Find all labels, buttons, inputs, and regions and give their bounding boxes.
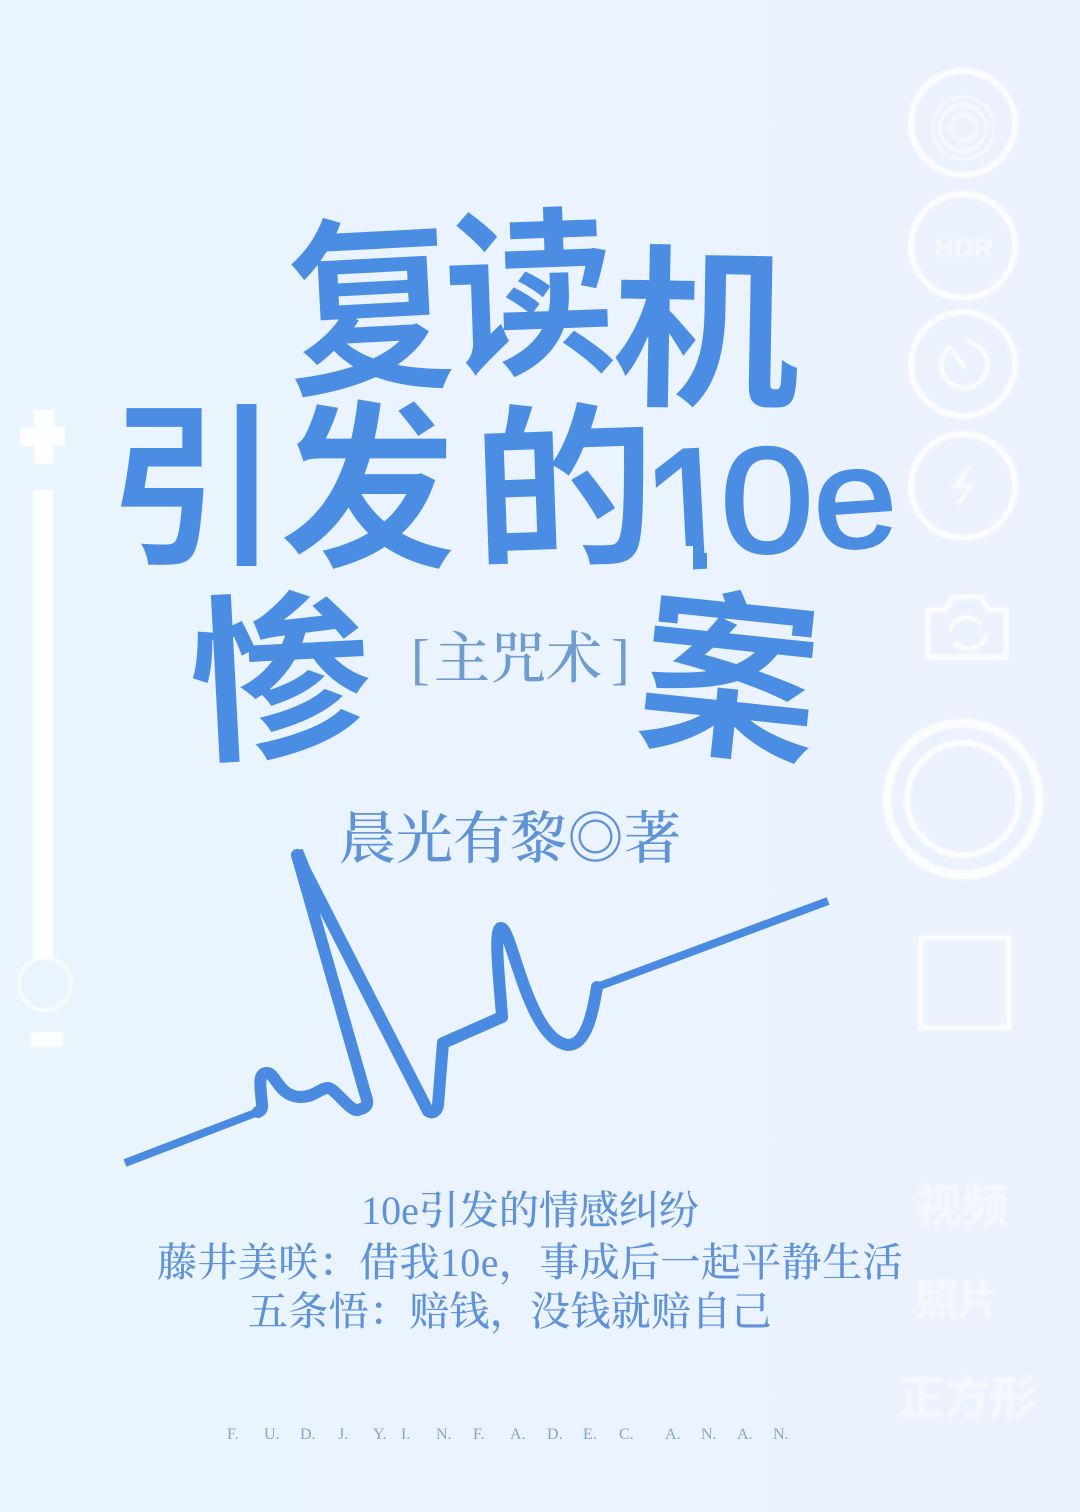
pinyin footer: F. (227, 1426, 239, 1443)
slider knob (19, 958, 71, 1010)
title line 1: 读 (441, 195, 619, 402)
icon: video mode ring (911, 71, 1015, 175)
icon: gallery square (921, 938, 1009, 1028)
icon: switch camera (928, 597, 1006, 657)
title line 2: 的 (469, 390, 659, 593)
pinyin footer: J. (338, 1426, 348, 1443)
pinyin footer: A. (665, 1426, 681, 1443)
label: square: 正方形 (898, 1372, 1036, 1424)
pinyin footer: A. (737, 1426, 753, 1443)
pinyin footer: U. (264, 1426, 280, 1443)
pinyin footer: D. (300, 1426, 316, 1443)
icon: HDR ring (911, 194, 1015, 298)
pinyin footer: N. (701, 1426, 717, 1443)
icon: shutter button (887, 723, 1039, 875)
title line 2: e (807, 417, 902, 581)
icon: HDR ring: HDR (935, 233, 993, 263)
series tag: [ (411, 629, 430, 691)
pinyin footer: F. (473, 1426, 485, 1443)
synopsis (157, 1188, 903, 1334)
title line 1: 机 (610, 233, 802, 432)
title line 2 (120, 399, 892, 570)
title line 3 left: 惨 (184, 576, 378, 787)
main title (108, 195, 902, 791)
synopsis: 五条悟：赔钱，没钱就赔自己 (248, 1289, 772, 1334)
series tag: 主咒术 (434, 629, 602, 691)
icon: flash ring (911, 434, 1015, 538)
title line 3 right: 案 (629, 572, 829, 791)
pinyin footer: A. (510, 1426, 526, 1443)
title line 1: 复 (281, 202, 460, 423)
pinyin footer: N. (773, 1426, 789, 1443)
title line 1 (281, 195, 802, 432)
synopsis: 10e引发的情感纠纷 (361, 1188, 699, 1233)
title line 2: 0 (720, 416, 814, 584)
camera controls on the right (887, 71, 1039, 1028)
zoom slider on the left (19, 410, 71, 1047)
icon: minus (31, 1032, 63, 1047)
synopsis: 藤井美咲：借我10e，事成后一起平静生活 (157, 1240, 903, 1285)
pinyin footer: E. (583, 1426, 597, 1443)
icon: timer ring (911, 312, 1015, 416)
label: photo: 照片 (916, 1277, 1000, 1324)
author line: 晨光有黎◎著 (339, 808, 681, 871)
pinyin footer: D. (547, 1426, 563, 1443)
chart: heartbeat line (125, 850, 828, 1163)
icon: plus (20, 410, 65, 464)
slider track (33, 490, 53, 958)
pinyin footer: Y. (373, 1426, 386, 1443)
camera mode labels (898, 1180, 1036, 1424)
title line 2: 引 (108, 391, 278, 588)
label: video: 视频 (916, 1180, 1008, 1232)
series tag: ] (611, 629, 630, 691)
pinyin footer: N. (436, 1426, 452, 1443)
pinyin footer: I. (401, 1426, 410, 1443)
pinyin footer: C. (619, 1426, 634, 1443)
title line 2: 1 (637, 411, 743, 607)
title line 2: 发 (280, 390, 456, 591)
